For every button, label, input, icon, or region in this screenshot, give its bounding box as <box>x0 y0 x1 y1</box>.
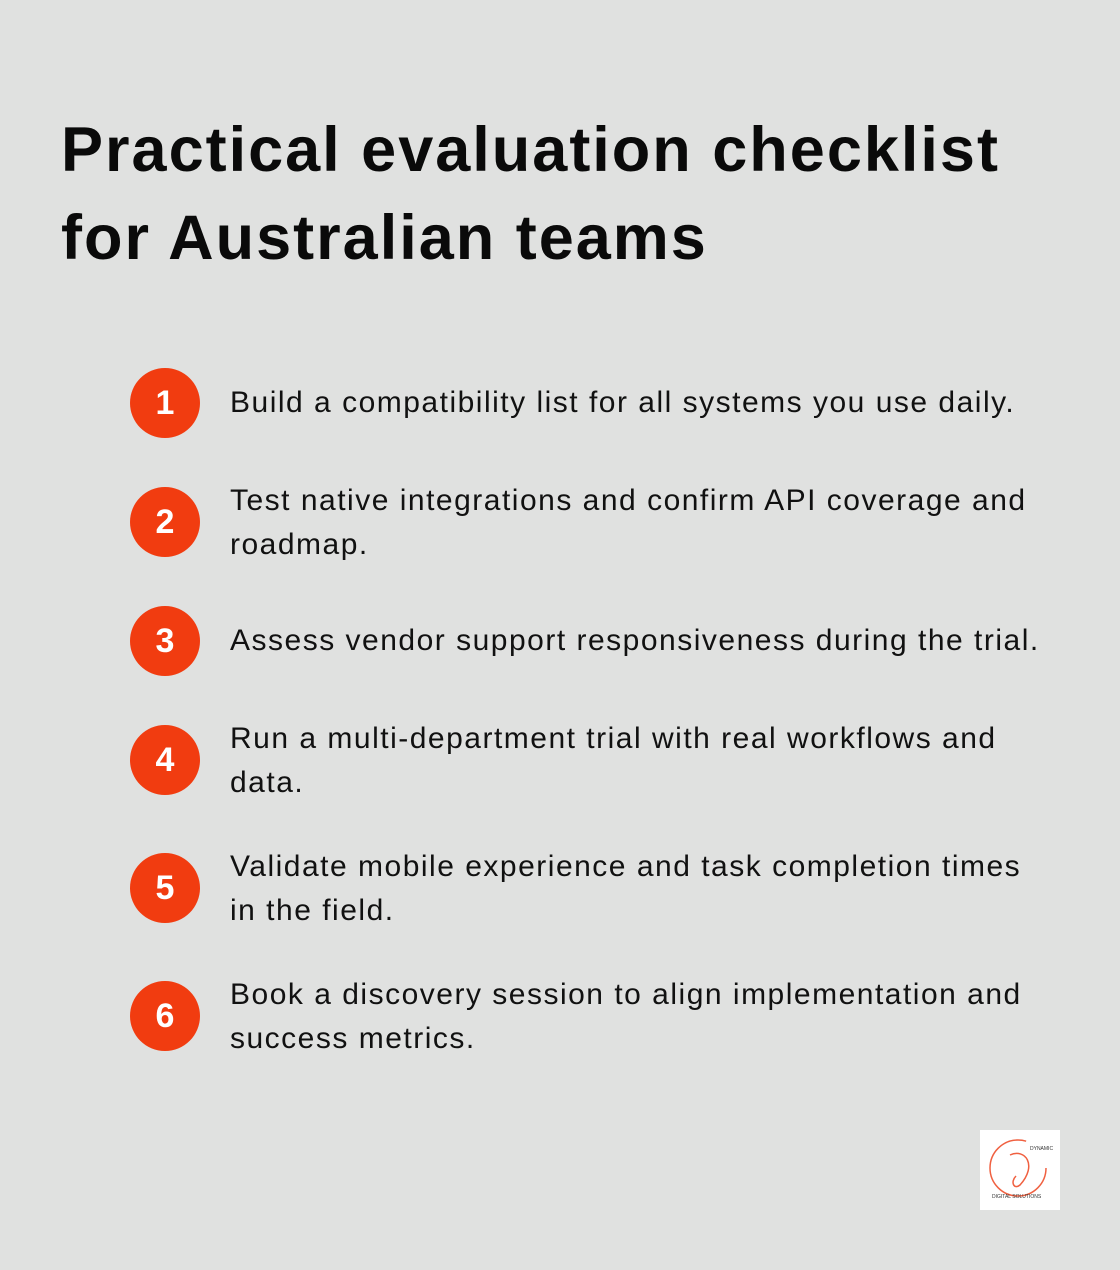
item 4: 4 <box>156 741 174 779</box>
item 3 <box>130 606 1040 676</box>
logo: DIGITAL SOLUTIONS <box>992 1194 1042 1200</box>
item 1: 1 <box>156 384 174 422</box>
item 3: 3 <box>156 622 174 660</box>
title: Practical evaluation checklist <box>61 115 1000 185</box>
item 6: Book a discovery session to align implementation and success metrics. <box>230 978 1022 1055</box>
item 5: Validate mobile experience and task completion times in the field. <box>230 850 1021 927</box>
logo <box>980 1130 1060 1210</box>
logo: DYNAMIC <box>1030 1146 1053 1152</box>
item 2: 2 <box>156 503 174 541</box>
item 4: Run a multi-department trial with real workflows and data. <box>230 722 997 799</box>
item 6: 6 <box>156 997 174 1035</box>
title: for Australian teams <box>61 203 708 273</box>
item 1 <box>130 368 1015 438</box>
item 5: 5 <box>156 869 174 907</box>
item 3: Assess vendor support responsiveness during the trial. <box>230 624 1040 657</box>
title <box>61 115 1000 273</box>
item 1: Build a compatibility list for all systems you use daily. <box>230 386 1015 419</box>
item 2: Test native integrations and confirm API coverage and roadmap. <box>230 484 1027 561</box>
